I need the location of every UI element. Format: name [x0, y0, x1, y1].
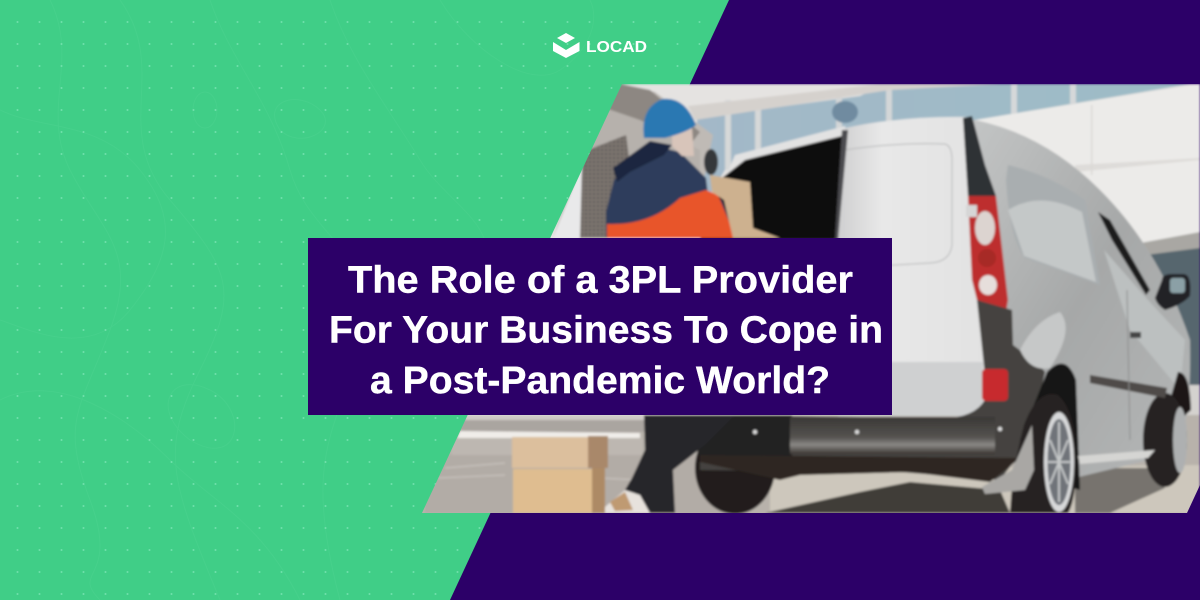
- title box: [308, 238, 892, 415]
- purple diagonal panel: [450, 0, 1200, 600]
- side mirror: [1155, 274, 1190, 310]
- ground and curb: [420, 415, 1200, 515]
- man: legs: [624, 415, 702, 513]
- title text: a Post-Pandemic World?: [370, 360, 830, 402]
- man: jacket: [606, 145, 736, 238]
- logo wordmark: LOCAD: [586, 39, 647, 56]
- title text: The Role of a 3PL Provider: [348, 260, 853, 302]
- mud flap: [982, 425, 1034, 494]
- delivery photo: man loading a van: [420, 84, 1200, 515]
- tail light: [968, 196, 1008, 312]
- title text: For Your Business To Cope in: [329, 310, 883, 352]
- icon: cube: [553, 33, 580, 58]
- black pillar: [963, 116, 996, 196]
- man: neck and hat: [672, 128, 694, 156]
- white van rear door: [838, 116, 966, 238]
- side window: [1006, 166, 1062, 208]
- van body panel: [964, 118, 1190, 490]
- held cardboard box: [710, 175, 780, 238]
- rear wheel arch: [1034, 362, 1081, 491]
- under-van wheel: [694, 448, 775, 513]
- rear wheel: [1010, 394, 1076, 513]
- title text: [329, 260, 883, 402]
- topographic contour texture: [0, 0, 594, 600]
- body trim: [1090, 375, 1167, 398]
- building windows: [696, 84, 1188, 193]
- front wheel: [1170, 372, 1191, 420]
- stacked boxes: [512, 436, 608, 513]
- open rear door: [556, 91, 714, 230]
- rear corner and bumper: [700, 300, 1045, 480]
- white building wall: [987, 103, 1198, 240]
- logo: [553, 33, 647, 58]
- van door opening: [730, 125, 846, 170]
